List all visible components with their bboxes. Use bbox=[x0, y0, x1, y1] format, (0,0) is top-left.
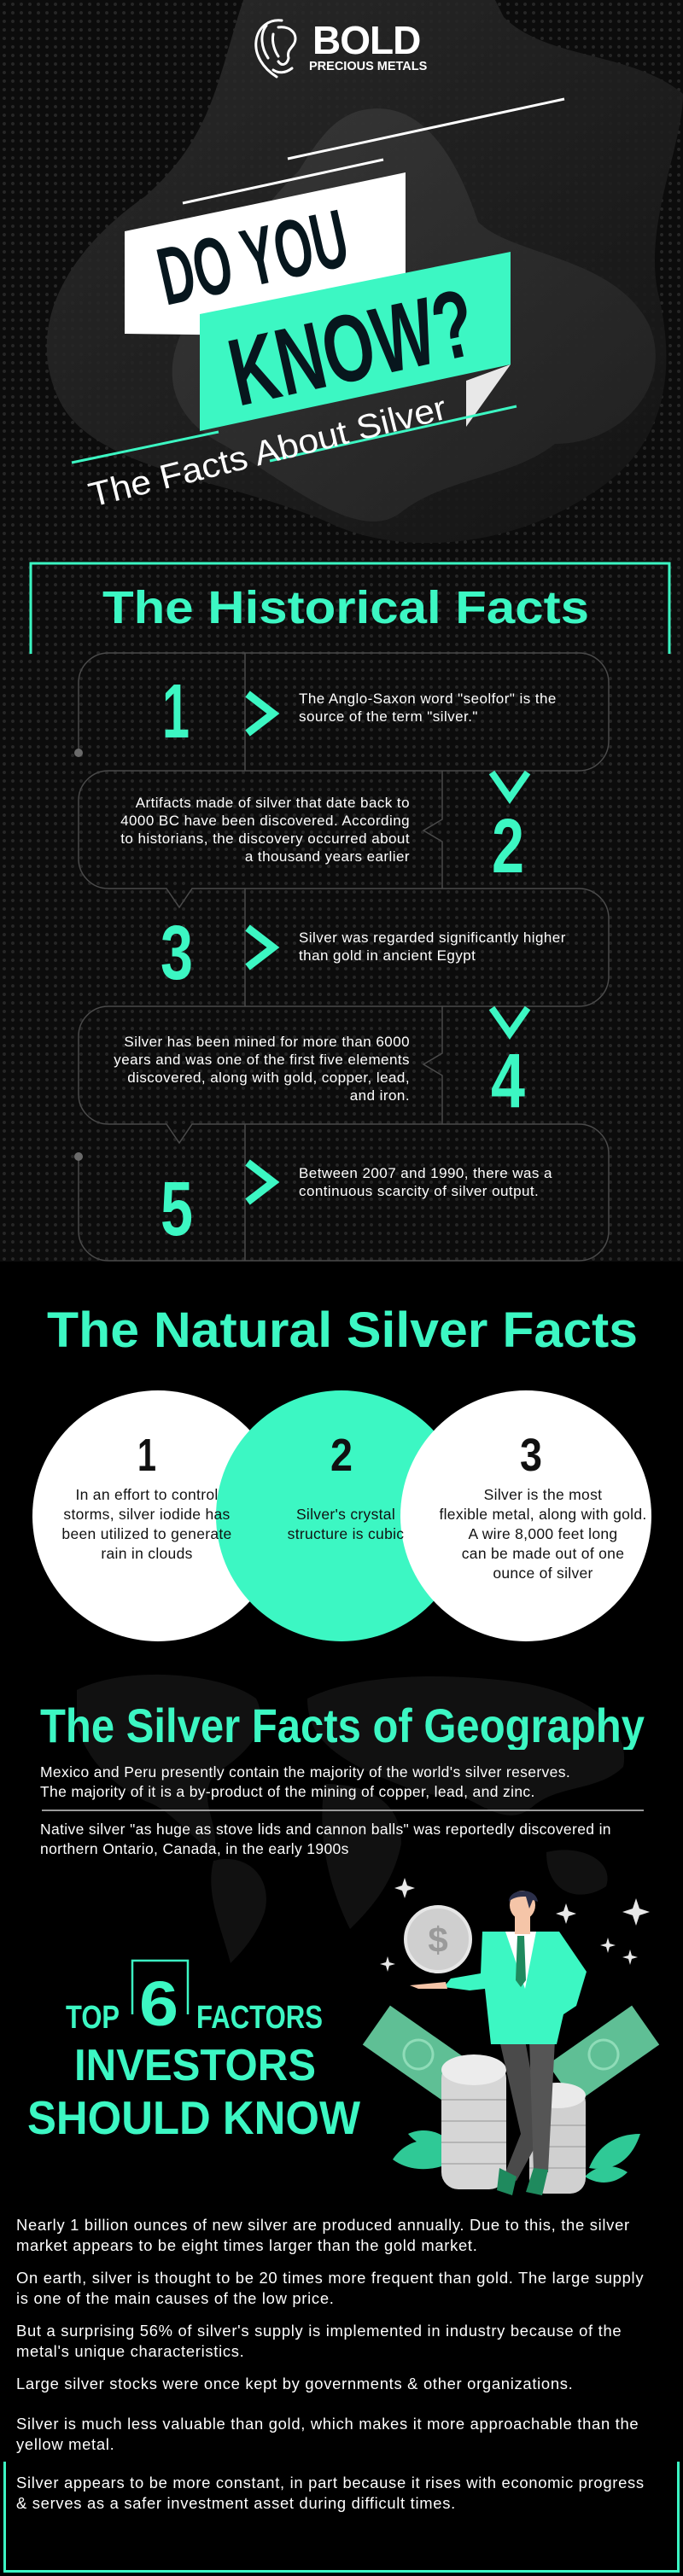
logo: BOLD bbox=[312, 18, 420, 62]
geography text 1 bbox=[40, 1763, 570, 1799]
background: world map silhouette bbox=[77, 1675, 624, 1963]
text: & serves as a safer investment asset during difficult times. bbox=[16, 2494, 456, 2511]
icon: lion head bbox=[254, 19, 297, 79]
circle 3 text bbox=[439, 1486, 647, 1582]
fact 3 text: than gold in ancient Egypt bbox=[299, 947, 476, 964]
geography text 1: Mexico and Peru presently contain the majority of the world's silver reserves. bbox=[40, 1763, 570, 1780]
heading: The Historical Facts bbox=[102, 582, 589, 633]
fact 1 number + arrow: 1 bbox=[162, 669, 190, 755]
circle 3 text: ounce of silver bbox=[493, 1565, 593, 1582]
circle numbers bbox=[137, 1430, 542, 1481]
coin stacks bbox=[441, 2061, 506, 2189]
circle 1 text: In an effort to control bbox=[75, 1486, 219, 1503]
circle 2 text bbox=[288, 1506, 404, 1542]
fact 4 number + arrow: 4 bbox=[491, 1039, 525, 1124]
heading: The Natural Silver Facts bbox=[47, 1303, 638, 1358]
circle 1 text bbox=[61, 1486, 232, 1562]
fact 1 text: The Anglo-Saxon word "seolfor" is the bbox=[299, 691, 557, 707]
text: metal's unique characteristics. bbox=[16, 2342, 244, 2359]
heading: top 6 factors: TOP bbox=[66, 2000, 120, 2036]
fact 4 text: and iron. bbox=[350, 1087, 410, 1104]
hero: blobs, title banners: KNOW? bbox=[219, 269, 484, 426]
fact 3 number + arrow bbox=[161, 911, 273, 996]
circle 2 text: Silver's crystal bbox=[296, 1506, 395, 1523]
bottom frame bbox=[3, 2462, 680, 2573]
teal banner bbox=[466, 364, 511, 427]
fact 2 number + arrow: 2 bbox=[492, 804, 524, 889]
fact 2 number + arrow bbox=[492, 772, 528, 889]
circle numbers: 1 bbox=[137, 1430, 156, 1481]
text: yellow metal. bbox=[16, 2434, 114, 2453]
panel: historical facts bbox=[29, 562, 671, 1262]
fact 5 text: Between 2007 and 1990, there was a bbox=[299, 1165, 552, 1181]
hero: blobs, title banners: The Facts About Silver bbox=[85, 389, 450, 515]
text: Large silver stocks were once kept by governments & other organizations. bbox=[16, 2375, 574, 2392]
circle 3 text: A wire 8,000 feet long bbox=[469, 1525, 617, 1542]
fact 4 text: discovered, along with gold, copper, lead, bbox=[127, 1069, 410, 1086]
text: But a surprising 56% of silver's supply is implemented in industry because of the bbox=[16, 2322, 622, 2340]
logo bbox=[254, 18, 427, 79]
circle 3 text: can be made out of one bbox=[462, 1545, 624, 1562]
geography text 2 bbox=[40, 1821, 611, 1857]
circle 2 text: structure is cubic bbox=[288, 1525, 404, 1542]
man bbox=[499, 2040, 542, 2181]
heading frame bbox=[31, 563, 669, 654]
circle 1 text: rain in clouds bbox=[101, 1545, 193, 1562]
text block: six factors: Nearly 1 billion ounces of new silver are produced annually. Due to this, the silver bbox=[16, 2216, 630, 2234]
fact 5 number + arrow: 5 bbox=[161, 1167, 193, 1252]
hero: blobs, title banners bbox=[46, 0, 683, 543]
circle 1 text: storms, silver iodide has bbox=[63, 1506, 231, 1523]
fact 2 text: Artifacts made of silver that date back to bbox=[136, 795, 410, 811]
fact 3 text bbox=[299, 930, 566, 964]
illustration: investor with silver coins: $ bbox=[428, 1920, 448, 1960]
fact 5 text bbox=[299, 1165, 552, 1199]
text: Silver appears to be more constant, in part because it rises with economic progress bbox=[16, 2474, 645, 2491]
panel: natural silver facts bbox=[32, 1303, 651, 1641]
fact 3 text: Silver was regarded significantly higher bbox=[299, 930, 566, 946]
fact 2 text: to historians, the discovery occurred about bbox=[120, 830, 410, 847]
fact 2 text: a thousand years earlier bbox=[245, 848, 410, 865]
fact 3 number + arrow: 3 bbox=[161, 911, 193, 996]
fact 4 number + arrow bbox=[491, 1008, 528, 1124]
heading: top 6 factors: 6 bbox=[139, 1968, 178, 2039]
fact 1 text: source of the term "silver." bbox=[299, 708, 478, 725]
circles bbox=[32, 1390, 283, 1641]
fact 1 number + arrow bbox=[162, 669, 273, 755]
bills bbox=[363, 2006, 474, 2103]
fact 2 text bbox=[120, 795, 410, 865]
circle 3 text: flexible metal, along with gold. bbox=[439, 1506, 647, 1523]
circle 1 text: been utilized to generate bbox=[61, 1525, 232, 1542]
fact 5 text: continuous scarcity of silver output. bbox=[299, 1183, 539, 1199]
geography text 1: The majority of it is a by-product of the mining of copper, lead, and zinc. bbox=[40, 1782, 535, 1799]
background: dotted texture top bbox=[0, 0, 683, 1262]
hero: blobs, title banners: DO YOU bbox=[149, 193, 356, 323]
fact 1 text bbox=[299, 691, 557, 725]
circle numbers: 2 bbox=[330, 1430, 353, 1481]
sparkles bbox=[380, 1878, 650, 1972]
text: Silver is much less valuable than gold, which makes it more approachable than the bbox=[16, 2415, 639, 2433]
logo: PRECIOUS METALS bbox=[309, 60, 427, 73]
geography text 2: Native silver "as huge as stove lids and cannon balls" was reportedly discovered in bbox=[40, 1821, 611, 1838]
teal lines bbox=[72, 432, 219, 463]
heading: top 6 factors: INVESTORS bbox=[74, 2041, 316, 2090]
white lines bbox=[288, 99, 564, 159]
illustration: investor with silver coins bbox=[362, 1878, 659, 2195]
fact 4 text: years and was one of the first five elements bbox=[114, 1052, 410, 1068]
fact 4 text: Silver has been mined for more than 6000 bbox=[124, 1034, 410, 1050]
fact 4 text bbox=[114, 1034, 410, 1104]
text: On earth, silver is thought to be 20 times more frequent than gold. The large supply bbox=[16, 2269, 644, 2287]
geography text 2: northern Ontario, Canada, in the early 1900s bbox=[40, 1840, 349, 1857]
white banner bbox=[125, 172, 406, 337]
text: is one of the main causes of the low price. bbox=[16, 2289, 335, 2306]
circle 3 text: Silver is the most bbox=[484, 1486, 602, 1503]
leaves bbox=[393, 2130, 457, 2169]
text block: six factors: market appears to be eight times larger than the gold market. bbox=[16, 2236, 478, 2253]
timeline outline bbox=[79, 653, 609, 1261]
text block: six factors bbox=[16, 2216, 630, 2254]
fact 5 number + arrow bbox=[161, 1163, 273, 1252]
fact 2 text: 4000 BC have been discovered. According bbox=[120, 813, 410, 829]
heading: top 6 factors: FACTORS bbox=[196, 2000, 323, 2036]
circle numbers: 3 bbox=[520, 1430, 542, 1481]
heading: top 6 factors bbox=[27, 1960, 360, 2142]
coin held bbox=[406, 1907, 470, 1972]
